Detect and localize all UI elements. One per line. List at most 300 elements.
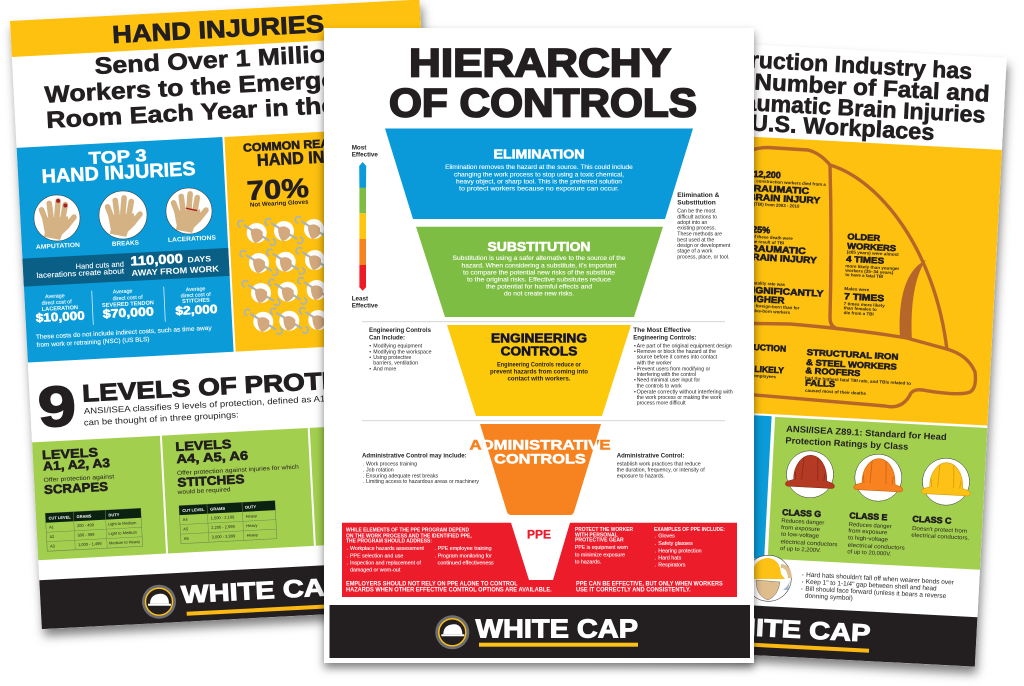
text: PPE effectiveness	[576, 580, 723, 594]
panel: levels A1 A2 A3	[42, 445, 143, 551]
text: engineering controls can include: Modifying equipment	[373, 343, 423, 349]
text: days away from work: AWAY FROM WORK	[131, 263, 220, 278]
text: program elements: PPE employee training	[438, 546, 492, 552]
funnel tier: substitution: hazard. When considering a substitute, it's important	[462, 262, 617, 269]
stat: laceration cost: direct cost of	[41, 299, 72, 307]
text: older workers: 4 TIMES	[846, 254, 885, 266]
panel: common reasons for hand injuries: HAND INJURIES	[257, 144, 383, 170]
text: most effective engineering controls: the work process or making the work	[637, 395, 722, 401]
heading: construction industry: Traumatic Brain Injuries	[721, 88, 986, 128]
table: A4 to A6: GRAMS	[210, 506, 226, 512]
text: 12,200 deaths: BRAIN INJURY	[748, 192, 820, 205]
heading: construction industry: Construction Industry has	[684, 43, 973, 84]
text: 12,200 deaths: 12,200	[753, 169, 781, 180]
text: most effective engineering controls: with the worker	[637, 361, 672, 367]
funnel tier: engineering controls: contact with workers.	[508, 375, 571, 382]
table: A1 to A3: 1,000 - 1,499	[78, 541, 102, 547]
heading: PPE tier: PPE	[527, 528, 551, 542]
text: males 7 times: 7 TIMES	[844, 291, 884, 303]
funnel tier: administrative controls	[470, 424, 610, 515]
text: protect the worker: WITH PERSONAL	[575, 532, 618, 538]
text: older workers: workers (25–34 years)	[844, 268, 894, 275]
chart: effectiveness arrow scale: Least	[352, 296, 369, 303]
text: structural iron and steel workers: had the highest fatal TBI rate, and TBIs related to	[805, 375, 911, 386]
text: class E: of up to 20,000V.	[847, 549, 892, 558]
text: small construction	[718, 340, 786, 379]
panel: centre footer with white cap logo: WHITE CAP	[476, 615, 638, 643]
panel: top 3 hand injuries	[33, 146, 220, 349]
text: structural iron and steel workers: & ROOFERS	[805, 365, 861, 378]
text: most effective engineering controls: •	[634, 349, 636, 355]
text: class E: from exposure	[848, 528, 887, 536]
table: A1 to A3: A2	[49, 534, 55, 539]
text: most effective engineering controls: •	[634, 378, 636, 384]
text: elimination and substitution note: Substitution	[677, 199, 716, 206]
text: most effective engineering controls: Operate correctly without interfering with	[637, 389, 733, 395]
table: A4 to A6: Heavy	[246, 523, 258, 528]
text: class C: CLASS C	[912, 514, 952, 526]
table: A4 to A6: DUTY	[245, 504, 257, 510]
text: program elements: .	[434, 553, 436, 559]
funnel tier: substitution: the potential for harmful effects and	[486, 284, 592, 291]
table: A1 to A3: A1	[49, 524, 55, 530]
text: older workers: (≥65 years) were almost	[847, 249, 899, 257]
labels: injury types: BREAKS	[112, 240, 139, 248]
text: older workers: more likely than younger	[845, 263, 900, 271]
funnel tier: elimination: to protect workers because no exposure can occur.	[459, 186, 619, 193]
table: A4 to A6	[179, 501, 277, 544]
funnel tier: substitution: to compare the potential new risks of the substitute	[463, 269, 615, 276]
heading: ANSI standard: Protection Ratings by Class	[785, 435, 909, 452]
text: structural iron and steel workers	[805, 347, 911, 396]
funnel tier: substitution	[416, 227, 663, 317]
heading: ANSI standard: ANSI/ISEA Z89.1: Standard for Head	[786, 424, 947, 442]
stat: 70 percent: 70%	[246, 173, 310, 206]
text: 12,200 deaths: construction workers died from a	[756, 178, 826, 187]
icon: amputation	[33, 194, 81, 242]
text: elimination and substitution note: difficult actions to	[677, 214, 717, 220]
table: A1 to A3	[45, 508, 143, 551]
text: cost note	[36, 325, 213, 349]
text: administrative control may include: Ensuring adequate rest breaks	[366, 473, 438, 479]
text: PPE warning: EMPLOYERS SHOULD NOT RELY ON PPE ALONE TO CONTROL	[346, 580, 518, 587]
stat: severed tendon cost: direct cost of	[112, 295, 143, 302]
text: program elements: .	[346, 561, 348, 567]
heading: top 3: TOP 3	[88, 146, 147, 168]
text: PPE effectiveness: PPE CAN BE EFFECTIVE, BUT ONLY WHEN WORKERS	[576, 580, 723, 587]
funnel tier: substitution: to the original risks. Effective subsitutes reduce	[467, 277, 611, 284]
table: A1 to A3: Light to Medium	[108, 520, 137, 527]
text: small construction: LIKELY	[754, 364, 784, 375]
text: class G: to low-voltage	[781, 532, 819, 540]
text: most effective engineering controls: The Most Effective	[633, 327, 691, 334]
text: days away from work: lacerations create about	[36, 266, 125, 280]
text: engineering controls can include: Engineering Controls	[369, 327, 431, 334]
heading: construction industry	[615, 43, 990, 145]
funnel tier: elimination: Elimination removes the hazard at the source. This could include	[445, 164, 633, 171]
text: program elements: .	[434, 546, 436, 552]
text: significantly higher: SIGNIFICANTLY	[745, 285, 824, 299]
chart: effectiveness arrow scale	[352, 144, 378, 310]
text: elimination and substitution note: existing process.	[677, 226, 716, 232]
panel: levels A1 A2 A3: LEVELS	[42, 445, 98, 462]
funnel tier: engineering controls: ENGINEERING	[491, 332, 587, 346]
text: protect the worker: PROTECTIVE GEAR	[575, 538, 624, 544]
text: protect the worker: PPE is equipment worn	[575, 545, 628, 551]
text: most effective engineering controls: the controls to work	[637, 384, 682, 390]
text: 12,200 deaths	[747, 169, 826, 209]
text: 25 percent: BRAIN INJURY	[745, 252, 817, 265]
panel: common reasons for hand injuries: COMMON REASONS FOR	[243, 135, 394, 155]
text: most effective engineering controls: source before it comes into contact	[637, 355, 718, 361]
stat: 70 percent: Not Wearing Gloves	[250, 200, 309, 209]
text: elimination and substitution note: best used at the	[677, 237, 714, 243]
text: class G: of up to 2,200V.	[780, 546, 822, 554]
funnel tier: administrative controls: ADMINISTRATIVE	[470, 437, 610, 452]
panel: levels A4 A5 A6: STITCHES	[177, 472, 245, 490]
funnel tier: elimination: heavy object, or sharp tool. This is the preferred solution	[456, 179, 622, 186]
stat: stitches cost: direct cost of	[180, 292, 211, 299]
text: class G: electrical conductors	[780, 539, 838, 548]
chart: effectiveness arrow scale: Most	[352, 144, 367, 151]
table: A1 to A3: Light to Medium	[108, 530, 138, 536]
text: small construction: employees	[753, 373, 777, 379]
text: older workers: to have a fatal TBI	[845, 272, 883, 279]
illustration: hard hat outline	[720, 147, 975, 407]
heading: send over 1 million workers: Workers to the Emergency	[44, 64, 383, 108]
text: administrative control may include: Administrative Control may include:	[362, 452, 467, 459]
text: class E: CLASS E	[849, 510, 888, 522]
text: most effective engineering controls: Prevent users from modifying or	[637, 366, 710, 372]
text: most effective engineering controls: interfering with the control	[637, 372, 696, 378]
text: 12,200 deaths: (TBI) from 2003 - 2010	[754, 201, 800, 209]
text: PPE effectiveness: USE IT CORRECTLY AND CONSISTENTLY.	[576, 587, 691, 594]
text: program elements: Program monitoring for	[438, 553, 492, 559]
text: program elements: WHILE ELEMENTS OF THE PPE PROGRAM DEPEND	[346, 528, 469, 534]
text: engineering controls can include	[369, 327, 432, 372]
panel: levels A4 A5 A6: A4, A5, A6	[176, 449, 249, 466]
text: class C	[911, 514, 970, 542]
text: administrative control may include: Limiting access to hazardous areas or machinery	[366, 479, 479, 485]
stat: laceration cost	[35, 293, 85, 325]
funnel tier: engineering controls: prevent hazards from coming into	[490, 368, 588, 375]
heading: send over 1 million workers: Send Over 1 Million	[94, 40, 343, 79]
text: class E	[847, 510, 905, 558]
stat: laceration cost: $10,000	[35, 308, 85, 325]
logo: white cap left footer: WHITE CAP	[181, 573, 345, 609]
text: program elements	[346, 528, 494, 574]
text: class E: Reduces danger	[849, 522, 892, 530]
text: engineering controls can include: And more	[373, 366, 396, 372]
text: 12,200 deaths: TRAUMATIC	[747, 183, 810, 196]
text: cost note: from work or retraining (NSC) (US BLS)	[36, 336, 150, 349]
text: class G: CLASS G	[782, 507, 822, 519]
text: days away from work	[36, 251, 220, 280]
panel: common reasons for hand injuries	[238, 135, 394, 334]
heading: 9 levels of protection	[36, 363, 428, 440]
stat: stitches cost	[175, 286, 218, 318]
labels: injury types: LACERATIONS	[168, 234, 216, 244]
text: program elements: damaged or worn-out	[350, 568, 401, 574]
heading: construction industry: the Highest Number of Fatal and	[615, 61, 990, 107]
panel: levels A4 A5 A6	[175, 437, 299, 544]
text: administrative control may include: Job rotation	[366, 468, 394, 474]
text: protect the worker: to hazards.	[575, 559, 601, 565]
text: protect the worker	[575, 527, 633, 565]
table: A1 to A3: GRAMS	[76, 513, 92, 519]
text: 25 percent: the result of TBI	[751, 239, 784, 245]
text: elimination and substitution note: adopt into an	[677, 220, 707, 226]
text: administrative control definition: the duration, frequency, or intensity of	[617, 468, 705, 474]
panel: PPE	[342, 523, 737, 597]
text: PPE warning: HAZARDS WHEN OTHER EFFECTIVE CONTROL OPTIONS ARE AVAILABLE.	[346, 587, 552, 594]
text: engineering controls can include: barriers, ventilation	[373, 361, 418, 367]
text: administrative control definition: establish work practices that reduce	[617, 462, 701, 468]
text: cost note: These costs do not include indirect costs, such as time away	[36, 325, 213, 341]
panel: levels A1 A2 A3: Offer protection against	[43, 474, 115, 484]
text: program elements: Inspection and replacement of	[350, 561, 421, 567]
text: 25 percent: of these death were	[752, 234, 793, 241]
icon: class C hard hat	[921, 458, 972, 505]
text: days away from work: Hand cuts and	[75, 260, 124, 271]
funnel tier: engineering controls: CONTROLS	[501, 344, 577, 358]
text: elimination and substitution note: These methods are	[677, 232, 722, 238]
text: most effective engineering controls: Engineering Controls:	[633, 334, 696, 341]
text: examples of PPE: .	[654, 555, 656, 561]
heading: ANSI standard	[785, 424, 947, 452]
text: older workers: WORKERS	[847, 241, 897, 253]
table: A4 to A6: A5	[183, 526, 189, 532]
funnel tier: elimination: changing the work process to stop using a toxic chemical,	[454, 171, 624, 178]
text: structural iron and steel workers: STRUCTURAL IRON	[807, 347, 899, 362]
panel: centre footer with white cap logo	[330, 605, 750, 658]
stat: severed tendon cost: SEVERED TENDON	[102, 300, 154, 309]
text: program elements: PPE selection and use	[350, 553, 403, 559]
text: program elements: Workplace hazards assessment	[350, 546, 425, 552]
text: elimination and substitution note: design or development	[677, 243, 731, 249]
text: examples of PPE: Hard hats	[658, 555, 682, 561]
table: A1 to A3: CUT LEVEL	[48, 514, 71, 521]
panel: levels A1 A2 A3: A1, A2, A3	[43, 456, 110, 473]
text: engineering controls can include: •	[369, 349, 371, 355]
icon: lacerations	[165, 187, 213, 235]
funnel tier: substitution: SUBSTITUTION	[488, 240, 590, 254]
text: class E: to high-voltage	[848, 535, 888, 543]
text: engineering controls can include: Using protective	[373, 355, 411, 361]
logo: white cap right footer: WHITE CAP	[707, 612, 871, 648]
text: engineering controls can include: •	[369, 366, 371, 372]
text: most effective engineering controls: •	[634, 389, 636, 395]
text: most effective engineering controls: •	[634, 343, 636, 349]
text: structural iron and steel workers: caused most of their deaths	[805, 388, 867, 396]
text: administrative control definition: exposure to hazards.	[617, 473, 665, 479]
text: significantly higher: HIGHER	[746, 294, 785, 306]
panel: levels A4 A5 A6: LEVELS	[175, 437, 232, 454]
stat: stitches cost: Average	[186, 286, 206, 293]
text: most effective engineering controls: Are part of the original equipment design	[637, 343, 732, 349]
stat: stitches cost: STITCHES	[182, 298, 210, 305]
icon grid: wrenches and gloves	[238, 217, 337, 334]
funnel tier: elimination	[385, 128, 693, 219]
text: significantly higher: native-born workers	[748, 308, 791, 315]
text: significantly higher: The TBI fatality rate was	[735, 279, 786, 287]
text: class E: electrical conductors	[848, 543, 905, 552]
text: significantly higher: in foreign-born than for	[751, 303, 800, 311]
panel: levels A1 A2 A3: SCRAPES	[44, 480, 108, 497]
panel: hierarchy of controls poster (centre)	[324, 28, 754, 663]
stat: stitches cost: $2,000	[175, 302, 218, 318]
text: program elements: ON THE WORK PROCESS AND THE IDENTIFIED PPE,	[346, 533, 472, 539]
text: most effective engineering controls: •	[634, 366, 636, 372]
text: class G: from exposure	[781, 525, 820, 533]
text: examples of PPE: Respirators	[658, 563, 686, 569]
table: A1 to A3: Medium to Heavy	[109, 539, 140, 546]
text: most effective engineering controls: process more difficult	[637, 401, 686, 407]
table: A1 to A3: 200 - 499	[77, 522, 95, 528]
icon: class E hard hat	[854, 454, 904, 501]
labels: injury types: AMPUTATION	[36, 242, 81, 251]
text: structural iron and steel workers: & STEEL WORKERS	[806, 357, 897, 372]
chart: effectiveness arrow scale: Effective	[352, 303, 378, 310]
table: A4 to A6: A4	[183, 517, 189, 522]
text: administrative control may include: .	[362, 473, 364, 479]
heading: 9 levels of protection: LEVELS OF PROTECTION	[82, 363, 428, 408]
text: most effective engineering controls: Need minimal user input for	[637, 378, 700, 384]
text: administrative control definition: Administrative Control:	[617, 452, 684, 459]
text: males 7 times: than females to	[844, 305, 877, 312]
funnel tier: substitution: do not create new risks.	[504, 291, 574, 298]
text: examples of PPE: .	[654, 548, 656, 554]
text: older workers: OLDER	[847, 231, 880, 243]
text: males 7 times: Males were	[844, 286, 870, 292]
panel: levels A4 A5 A6: Offer protection against injuries for which	[177, 465, 299, 477]
panel: head protection classes	[780, 424, 972, 558]
text: days away from work: DAYS	[187, 254, 212, 264]
text: examples of PPE: EXAMPLES OF PPE INCLUDE:	[654, 527, 725, 533]
title	[389, 42, 697, 125]
stat: severed tendon cost	[102, 288, 154, 321]
funnel tier: elimination: ELIMINATION	[494, 147, 584, 161]
text: administrative control may include: Work process training	[366, 462, 417, 468]
text: elimination and substitution note: process, place, or tool.	[677, 254, 730, 260]
text: males 7 times	[844, 286, 885, 317]
text: elimination and substitution note: stage of a work	[677, 249, 713, 255]
icon: breaks	[98, 190, 148, 240]
heading: 9 levels of protection: 9	[36, 374, 78, 440]
text: examples of PPE: Safety glasses	[658, 541, 693, 547]
text: 25 percent	[744, 224, 817, 265]
text: significantly higher	[735, 279, 824, 315]
text: administrative control may include: .	[362, 462, 364, 468]
text: administrative control definition	[617, 452, 705, 479]
text: class G	[780, 507, 838, 554]
heading: hand injuries: HAND INJURIES	[112, 11, 325, 49]
table: A4 to A6: 3,000 - 3,999	[212, 533, 236, 540]
text: elimination and substitution note: Elimination &	[677, 192, 720, 199]
text: most effective engineering controls	[633, 327, 733, 407]
text: examples of PPE: .	[654, 563, 656, 569]
text: administrative control may include	[362, 452, 479, 485]
text: days away from work: 110,000	[130, 251, 183, 268]
text: engineering controls can include: Modifying the workspace	[373, 349, 432, 355]
table: A4 to A6: 2,200 - 2,999	[211, 524, 236, 530]
text: elimination and substitution note	[677, 192, 731, 260]
panel: hand injuries poster (left)	[10, 0, 451, 629]
text: examples of PPE: .	[654, 541, 656, 547]
heading: construction industry: in U.S. Workplaces	[723, 108, 935, 145]
stat: laceration cost: LACERATION	[42, 305, 78, 313]
logo: white cap left footer	[142, 573, 345, 619]
icon: class G hard hat	[785, 451, 836, 498]
chart: effectiveness arrow scale: Effective	[352, 152, 378, 159]
heading: 9 levels of protection: can be thought of in three groupings:	[84, 409, 239, 427]
funnel tier: engineering controls: Engineering Controls reduce or	[497, 361, 581, 368]
text: program elements: .	[346, 553, 348, 559]
text: protect the worker: to minimize exposure	[575, 552, 625, 558]
table: A4 to A6: Heavy	[247, 532, 258, 538]
text: administrative control may include: .	[362, 479, 364, 485]
stat: laceration cost: Average	[45, 293, 65, 300]
table: A1 to A3: A3	[50, 543, 56, 549]
text: engineering controls can include: •	[369, 343, 371, 349]
text: engineering controls can include: Can Include:	[369, 334, 405, 341]
heading: 9 levels of protection: ANSI/ISEA classifies 9 levels of protection, defined as A1 through A9, but they	[84, 389, 414, 416]
text: 25 percent: 25%	[752, 224, 770, 235]
text: hard hat fit guidance: Bill should face forward (unless it bears a reverse	[805, 586, 947, 600]
text: males 7 times: 7 times more likely	[844, 301, 885, 308]
text: class C: electrical conductors.	[911, 533, 970, 542]
text: hard hat fit guidance	[802, 572, 955, 602]
funnel tier: substitution: Substitution is using a safer alternative to the source of the	[452, 255, 626, 262]
table: A4 to A6: Heavy	[246, 513, 257, 519]
text: examples of PPE: Hearing protection	[658, 548, 702, 554]
text: PPE warning	[346, 580, 552, 594]
text: structural iron and steel workers: FALLS	[805, 378, 836, 389]
text: most effective engineering controls: Remove or block the hazard at the	[637, 349, 716, 355]
text: program elements: .	[346, 546, 348, 552]
text: class G: Reduces danger	[781, 518, 825, 527]
text: protect the worker: PROTECT THE WORKER	[575, 527, 633, 533]
heading: send over 1 million workers	[44, 40, 396, 133]
text: administrative control may include: .	[362, 468, 364, 474]
text: 25 percent: TRAUMATIC	[744, 243, 807, 256]
text: males 7 times: die from a TBI	[844, 310, 874, 317]
text: class C: Doesn't protect from	[912, 526, 967, 535]
table: A4 to A6: CUT LEVEL	[182, 507, 205, 513]
text: small construction: CONSTRUCTION	[718, 340, 786, 354]
panel: head injury poster (right)	[545, 35, 1007, 667]
text: program elements: continued effectiveness	[438, 561, 494, 567]
text: engineering controls can include: •	[369, 355, 371, 361]
title: OF CONTROLS	[389, 81, 697, 125]
table: A1 to A3: DUTY	[108, 512, 120, 517]
stat: severed tendon cost: Average	[113, 288, 133, 296]
icon: worker with hard hat	[745, 555, 791, 601]
text: hard hat fit guidance: Keep 1" to 1-1/4" gap between shell and head	[806, 579, 937, 593]
text: examples of PPE: Gloves	[658, 534, 675, 540]
text: program elements: THE PROGRAM SHOULD ADDRESS:	[346, 539, 432, 545]
table: A4 to A6: 1,500 - 2,199	[211, 514, 235, 521]
heading: send over 1 million workers: Room Each Year in the U.S.	[46, 89, 396, 133]
labels: injury types	[36, 234, 216, 251]
funnel tier: administrative controls: CONTROLS	[494, 451, 586, 466]
text: elimination and substitution note: Can be the most	[677, 209, 716, 215]
text: hard hat fit guidance: Hard hats shouldn't fall off when wearer bends over	[806, 572, 955, 586]
text: examples of PPE	[654, 527, 725, 569]
heading: top 3: HAND INJURIES	[41, 158, 196, 188]
table: A1 to A3: 500 - 999	[77, 532, 95, 538]
table: A4 to A6: A6	[184, 536, 190, 541]
